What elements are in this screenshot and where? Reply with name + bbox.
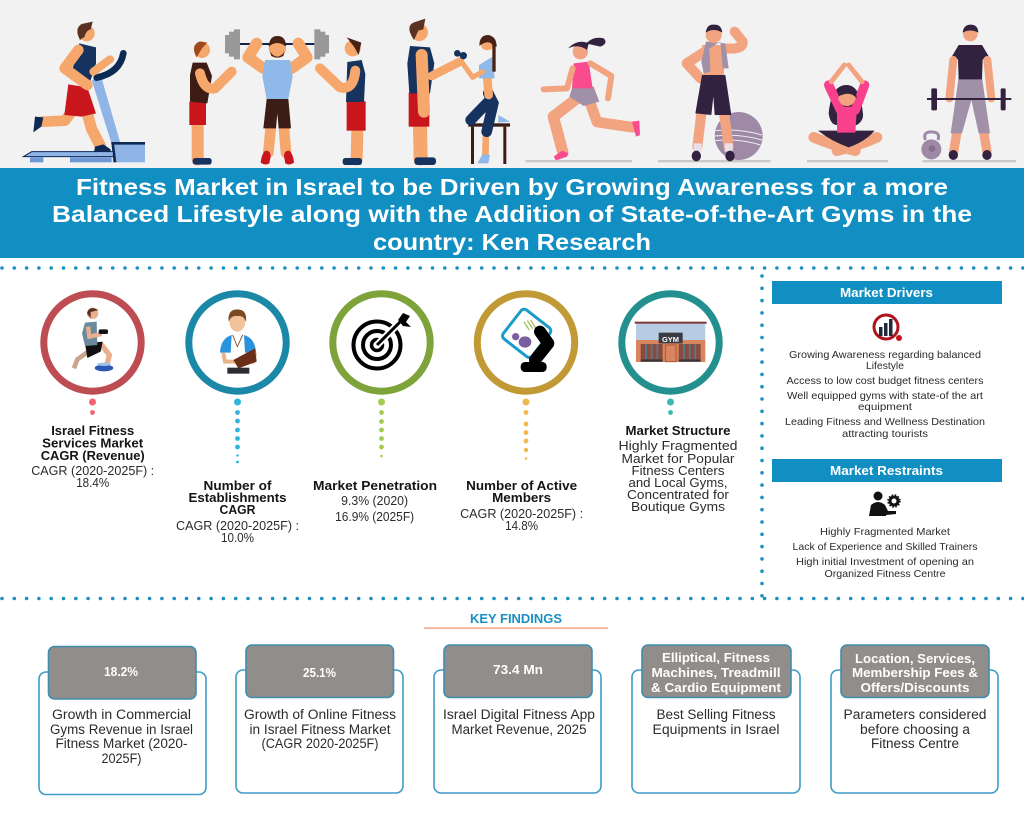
text: drivers list: [785, 349, 985, 440]
panel: market penetration: [313, 294, 437, 524]
card: online fitness growth: in Israel Fitness Market: [250, 722, 391, 737]
card: best selling equipment: Best Selling Fitness: [656, 707, 776, 722]
title band: [0, 168, 1024, 258]
text block: 14.8%: [505, 518, 538, 533]
text block: 16.9% (2025F): [335, 509, 414, 524]
heading: market restraints: [772, 459, 1002, 482]
connector dots: [234, 398, 241, 463]
icon: chart in magnifier: [874, 315, 902, 341]
figure: runner on treadmill: [23, 22, 145, 162]
text block: CAGR (2020-2025F) :: [460, 506, 583, 521]
figure: man with towel and exercise ball: [658, 25, 771, 162]
text block: Members: [492, 490, 551, 505]
connector dots: [667, 398, 674, 415]
panel: number of establishments CAGR: [176, 294, 299, 545]
panel: market drivers: [772, 281, 1002, 440]
panel: market restraints: [772, 459, 1002, 580]
card: parameters for choosing a centre: Membership Fees &: [852, 665, 978, 680]
heading: key findings: KEY FINDINGS: [470, 611, 562, 626]
text block: Market Penetration: [313, 478, 437, 493]
text block: [460, 478, 583, 533]
text: restraints list: [792, 526, 978, 580]
icon: trainer with clipboard in blue ring: [189, 294, 286, 391]
text: restraints list: High initial Investment of opening an: [796, 556, 974, 568]
title band: country: Ken Research: [373, 229, 651, 255]
heading: market restraints: Market Restraints: [830, 463, 943, 478]
figure: man lifting barbell with kettlebell: [921, 25, 1016, 162]
icon: gym building in teal ring: GYM: [662, 335, 679, 344]
text: drivers list: attracting tourists: [842, 428, 928, 440]
text block: CAGR: [220, 502, 256, 517]
text block: Israel Fitness: [51, 423, 134, 438]
figure: woman in yoga pose: [807, 65, 888, 162]
card: parameters for choosing a centre: Parameters considered: [844, 707, 986, 722]
text block: Market for Popular: [622, 451, 735, 466]
connector dots: [522, 398, 530, 460]
figure: three men with barbell: [189, 29, 366, 165]
card: best selling equipment: [632, 645, 800, 793]
figure: woman jogging: [525, 38, 640, 162]
icon: lunge with dumbbells in red ring: [44, 294, 141, 391]
title band: Fitness Market in Israel to be Driven by Growing Awareness for a more: [76, 174, 948, 200]
text: restraints list: Organized Fitness Centre: [824, 568, 946, 580]
icon: gym building in teal ring: [622, 294, 719, 391]
text: restraints list: Lack of Experience and Skilled Trainers: [792, 541, 978, 553]
connector dots: [378, 398, 385, 457]
text block: Establishments: [188, 490, 286, 505]
text: drivers list: Leading Fitness and Wellness Destination: [785, 416, 985, 428]
card: parameters for choosing a centre: Fitness Centre: [871, 736, 959, 751]
text: drivers list: Growing Awareness regarding balanced: [789, 349, 981, 361]
panel: market structure: [618, 294, 738, 514]
text block: CAGR (2020-2025F) :: [31, 463, 154, 478]
text block: Fitness Centers: [632, 463, 725, 478]
text: drivers list: equipment: [858, 401, 912, 413]
card: commercial gyms growth: [39, 646, 206, 794]
figure: trainer with woman on bench: [407, 19, 510, 165]
header illustration strip: [0, 0, 1024, 168]
card: commercial gyms growth: 2025F): [102, 751, 142, 766]
title band: Balanced Lifestyle along with the Addition of State-of-the-Art Gyms in the: [52, 201, 972, 227]
text block: Market Structure: [626, 423, 730, 438]
card: parameters for choosing a centre: before choosing a: [860, 722, 971, 737]
text block: 9.3% (2020): [341, 493, 408, 508]
text block: Services Market: [42, 436, 144, 450]
text block: 18.4%: [76, 475, 110, 490]
card: commercial gyms growth: 18.2%: [104, 664, 138, 679]
text block: Concentrated for: [627, 487, 730, 502]
card: parameters for choosing a centre: Offers/Discounts: [860, 680, 970, 695]
text block: Boutique Gyms: [631, 499, 726, 514]
text block: [313, 478, 437, 524]
heading: market drivers: Market Drivers: [840, 285, 933, 300]
panel: Israel fitness services market CAGR: [31, 294, 154, 490]
text: drivers list: Access to low cost budget fitness centers: [786, 375, 984, 387]
text block: and Local Gyms,: [628, 475, 728, 490]
card: online fitness growth: Growth of Online Fitness: [244, 707, 396, 722]
text: drivers list: Well equipped gyms with state-of the art: [787, 390, 983, 402]
connector dots: [89, 398, 96, 415]
text block: CAGR (2020-2025F) :: [176, 518, 299, 533]
card: parameters for choosing a centre: Location, Services,: [855, 651, 975, 666]
card: digital fitness app revenue: [434, 645, 601, 793]
card: best selling equipment: Elliptical, Fitness: [662, 650, 770, 665]
icon: businessman with gear: [869, 492, 900, 516]
card: best selling equipment: Machines, Treadmill: [652, 665, 780, 680]
card: digital fitness app revenue: Market Revenue, 2025: [452, 722, 586, 737]
card: best selling equipment: Equipments in Israel: [652, 722, 780, 737]
text: drivers list: Lifestyle: [866, 360, 904, 372]
card: online fitness growth: 25.1%: [303, 665, 336, 680]
text: restraints list: Highly Fragmented Market: [820, 526, 950, 538]
icon: target with arrow in green ring: [333, 294, 430, 391]
card: commercial gyms growth: Fitness Market (2020-: [56, 736, 188, 751]
text block: [176, 478, 299, 545]
text block: 10.0%: [221, 530, 254, 545]
card: online fitness growth: [236, 645, 403, 793]
text block: Number of Active: [466, 478, 577, 493]
text block: CAGR (Revenue): [41, 448, 145, 463]
card: online fitness growth: (CAGR 2020-2025F): [262, 736, 378, 751]
icon: membership card and hand in gold ring: [477, 294, 575, 391]
text block: Highly Fragmented: [618, 438, 738, 453]
card: commercial gyms growth: Growth in Commercial: [52, 707, 191, 722]
card: digital fitness app revenue: Israel Digital Fitness App: [443, 707, 595, 722]
card: digital fitness app revenue: 73.4 Mn: [493, 662, 543, 677]
card: parameters for choosing a centre: [831, 645, 998, 793]
text block: [618, 423, 738, 514]
card: best selling equipment: & Cardio Equipment: [651, 680, 782, 695]
heading: market drivers: [772, 281, 1002, 304]
panel: number of active members: [460, 294, 583, 533]
card: commercial gyms growth: Gyms Revenue in Israel: [50, 722, 193, 737]
text block: [31, 423, 154, 490]
text block: Number of: [204, 478, 272, 493]
